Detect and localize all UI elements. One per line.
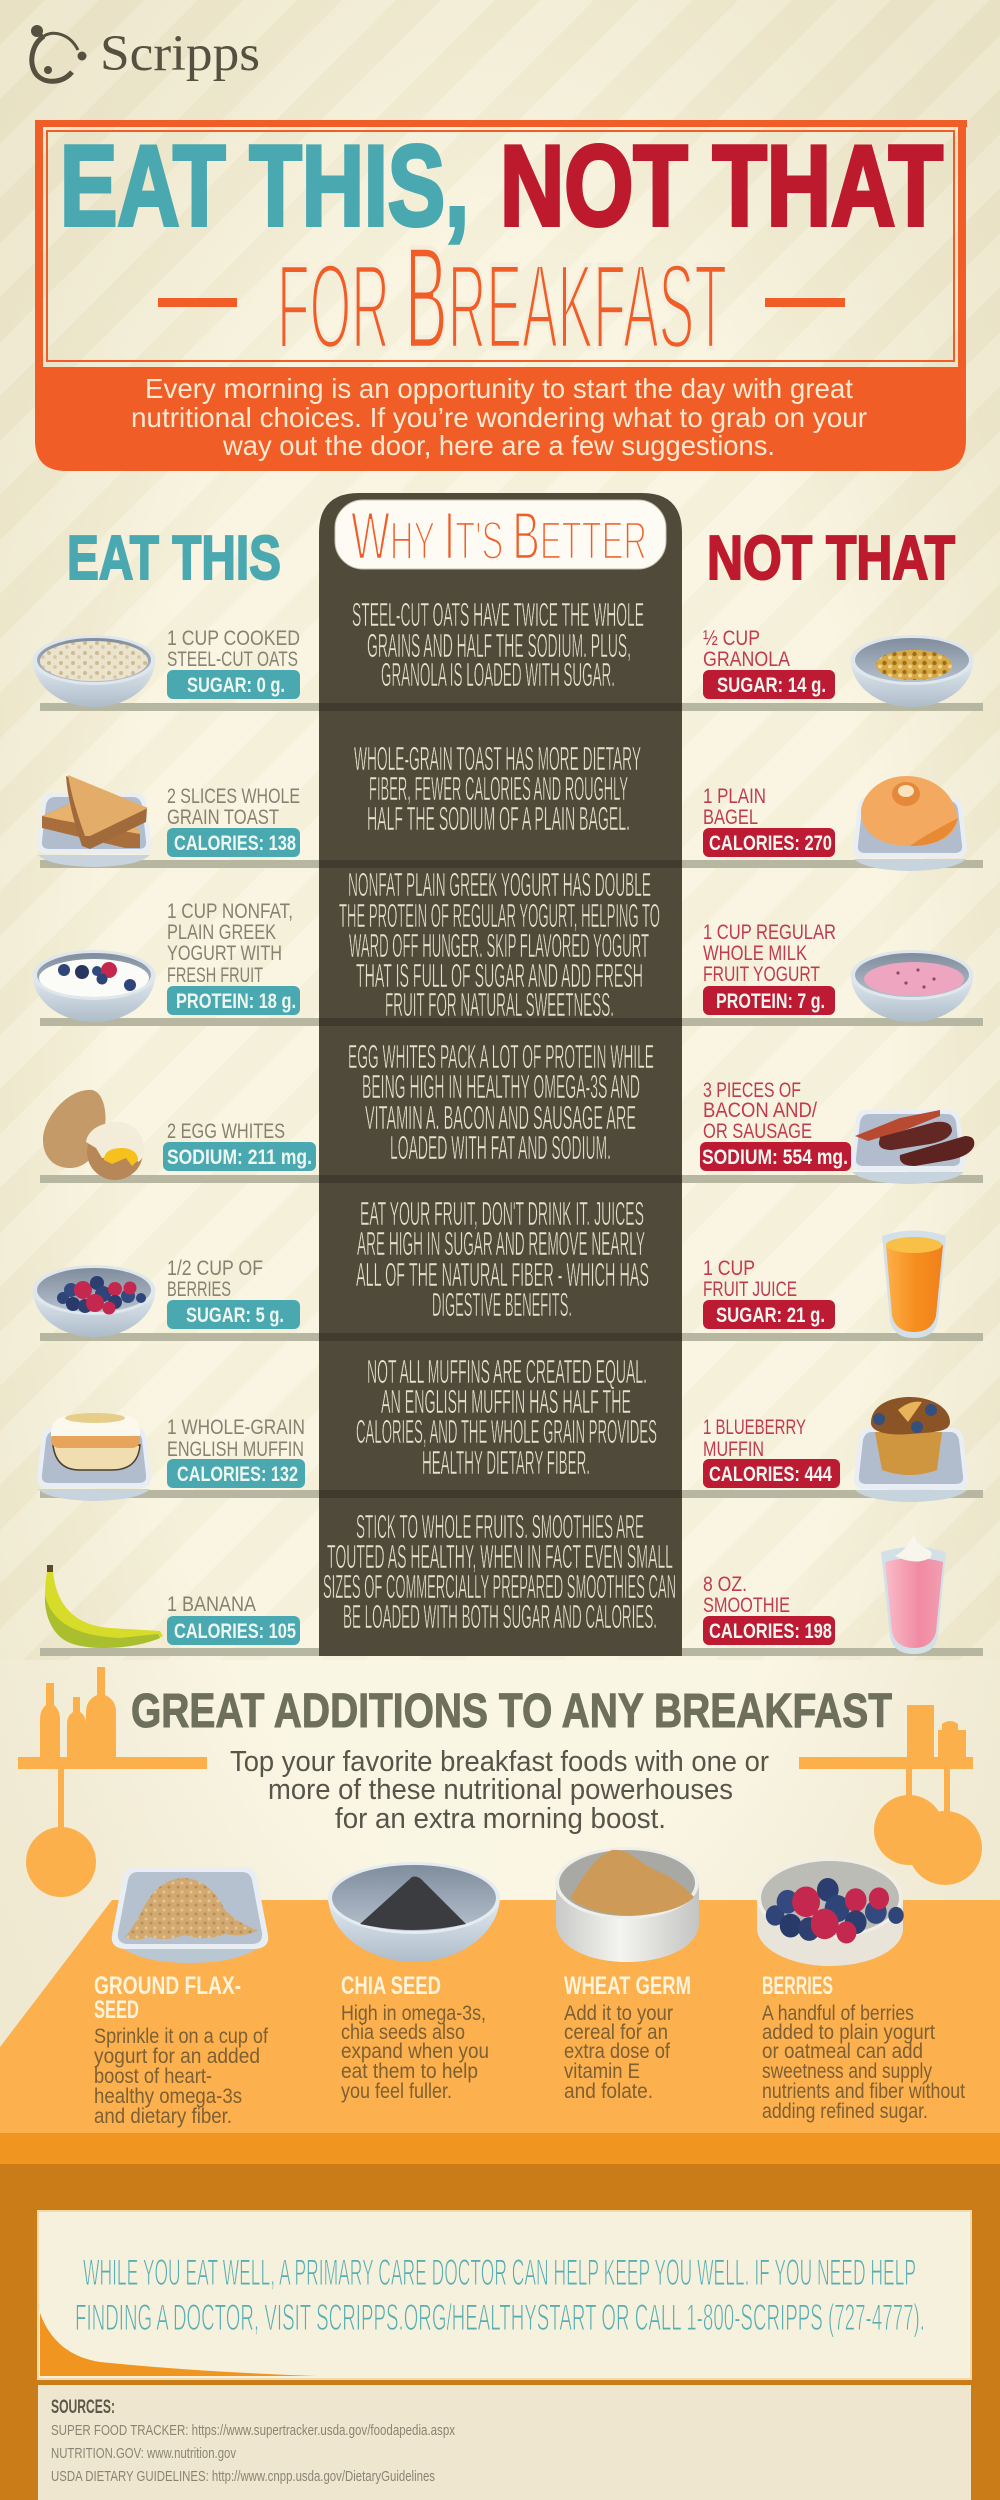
label — [167, 1257, 263, 1301]
row 5 right: juice — [703, 1230, 946, 1338]
icon: plate of bacon and sausage — [851, 1110, 974, 1184]
panel: why it's better: GRANOLA IS LOADED WITH SUGAR. — [381, 656, 615, 693]
stat pill — [700, 1142, 851, 1171]
heading: eat this: EAT THIS — [67, 524, 281, 593]
addition: chia seed: High in omega-3s, — [341, 2002, 486, 2025]
icon: toast on plate — [37, 775, 151, 867]
addition: wheat germ: WHEAT GERM — [564, 1972, 691, 2000]
title: eat this: EAT THIS, — [60, 123, 469, 250]
icon: flax seed tray — [112, 1867, 268, 1963]
row 6 left: english muffin — [37, 1413, 305, 1501]
addition: wheat germ: extra dose of — [564, 2040, 670, 2063]
icon: bowl of berries — [32, 1265, 156, 1337]
subtitle dash right — [765, 298, 845, 307]
label: BAGEL — [703, 806, 758, 829]
panel: why it's better: HALF THE SODIUM OF A PLAIN BAGEL. — [367, 800, 630, 837]
label — [703, 1573, 790, 1617]
icon: bowl of pink yogurt — [850, 950, 974, 1022]
addition: chia seed: CHIA SEED — [341, 1972, 441, 2000]
label: 8 OZ. — [703, 1573, 747, 1596]
stat pill: PROTEIN: 18 g. — [176, 990, 296, 1013]
label: 1 WHOLE-GRAIN — [167, 1416, 305, 1439]
text: additions intro — [230, 1746, 769, 1835]
label: ENGLISH MUFFIN — [167, 1438, 304, 1461]
panel: sources: NUTRITION.GOV: www.nutrition.gov — [51, 2445, 236, 2462]
text: additions intro: Top your favorite breakfast foods with one or — [230, 1746, 769, 1778]
row 6 right: blueberry muffin — [703, 1397, 968, 1502]
panel: why it's better: BEING HIGH IN HEALTHY OMEGA-3S AND — [362, 1068, 640, 1105]
label: 1 CUP — [703, 1257, 755, 1280]
label: WHOLE MILK — [703, 942, 807, 965]
label: 1 BLUEBERRY — [703, 1416, 806, 1439]
intro band — [35, 367, 966, 471]
label: MUFFIN — [703, 1438, 764, 1461]
stat pill: CALORIES: 444 — [709, 1463, 832, 1486]
panel: why it's better — [319, 493, 682, 1656]
row 2 left: toast — [37, 775, 300, 867]
text: eggs — [348, 1038, 654, 1166]
text: toast — [354, 740, 641, 837]
addition: flaxseed: boost of heart- — [94, 2065, 212, 2088]
addition: flaxseed: yogurt for an added — [94, 2045, 260, 2068]
row 4 right: bacon and sausage — [700, 1079, 974, 1184]
icon: bowl of yogurt with berries — [32, 950, 156, 1022]
stat pill — [163, 1142, 316, 1171]
stat pill: CALORIES: 270 — [709, 832, 832, 855]
stat pill — [703, 670, 835, 699]
icon: glass of juice — [882, 1230, 946, 1338]
panel: sources: SUPER FOOD TRACKER: https://www.supertracker.usda.gov/foodapedia.aspx — [51, 2422, 455, 2439]
label — [703, 785, 766, 829]
stat pill: SUGAR: 0 g. — [187, 674, 285, 697]
panel: why it's better: FRUIT FOR NATURAL SWEETNESS. — [385, 986, 614, 1023]
logo: Scripps — [31, 25, 260, 82]
text: additions intro: more of these nutritional powerhouses — [268, 1774, 733, 1806]
icon: bowl of oats — [32, 635, 156, 707]
label: SMOOTHIE — [703, 1594, 790, 1617]
addition: berries: nutrients and fiber without — [762, 2080, 965, 2103]
panel: call to action — [38, 2211, 971, 2379]
panel: sources — [38, 2385, 971, 2500]
stat pill: SODIUM: 211 mg. — [167, 1146, 312, 1169]
shelves — [40, 703, 983, 1656]
heading pill: WHY IT'S BETTER — [351, 498, 647, 574]
orange table — [0, 1900, 1000, 2500]
label: FRUIT JUICE — [703, 1278, 797, 1301]
text: yogurt — [339, 866, 660, 1023]
text: additions intro: for an extra morning boost. — [335, 1803, 666, 1835]
label: 2 SLICES WHOLE — [167, 785, 300, 808]
intro band: way out the door, here are a few suggestions. — [222, 430, 775, 461]
stat pill: SODIUM: 554 mg. — [702, 1146, 848, 1169]
panel: sources: SOURCES: — [51, 2397, 115, 2418]
icon: bagel on plate — [853, 776, 967, 871]
text: fruit — [356, 1195, 649, 1323]
label: FRUIT YOGURT — [703, 963, 820, 986]
addition: berries: BERRIES — [762, 1972, 833, 2000]
label: GRAIN TOAST — [167, 806, 279, 829]
icon: wheat germ bowl — [555, 1847, 699, 1962]
stat pill: SUGAR: 14 g. — [717, 674, 826, 697]
label: STEEL-CUT OATS — [167, 648, 298, 671]
logo: Scripps: Scripps — [100, 26, 260, 82]
addition: berries — [762, 1972, 965, 2123]
text: eggs: LOADED WITH FAT AND SODIUM. — [390, 1129, 611, 1166]
addition: berries: or oatmeal can add — [762, 2040, 923, 2063]
row 7 left: banana — [45, 1565, 300, 1648]
text: muffins — [356, 1353, 657, 1481]
addition: flaxseed — [94, 1972, 268, 2128]
stat pill — [167, 670, 300, 699]
addition: chia seed — [341, 1972, 489, 2103]
label: BERRIES — [167, 1278, 231, 1301]
intro band: nutritional choices. If you’re wondering what to grab on your — [131, 402, 867, 433]
label: YOGURT WITH — [167, 942, 282, 965]
addition: chia seed: expand when you — [341, 2040, 489, 2063]
label — [167, 1416, 305, 1461]
label — [167, 900, 293, 987]
kitchen shelf right with jar and pans — [799, 1705, 982, 1885]
text: oats — [352, 596, 644, 693]
addition: flaxseed: Sprinkle it on a cup of — [94, 2025, 268, 2048]
intro band: Every morning is an opportunity to start the day with great — [145, 373, 853, 404]
subtitle dash left — [158, 298, 237, 307]
addition: flaxseed: SEED — [94, 1996, 139, 2024]
addition: flaxseed: and dietary fiber. — [94, 2105, 232, 2128]
stat pill — [703, 986, 835, 1015]
row 1 right: granola — [703, 627, 974, 707]
label: 1 CUP NONFAT, — [167, 900, 293, 923]
stat pill — [167, 986, 300, 1015]
stat pill: CALORIES: 198 — [709, 1620, 832, 1643]
stat pill — [167, 828, 300, 857]
stat pill — [167, 1300, 300, 1329]
kitchen shelf left with bottles and spoon — [18, 1667, 207, 1897]
icon: chia seed bowl — [328, 1862, 500, 1962]
icon: bowl of granola — [850, 635, 974, 707]
stat pill — [703, 828, 835, 857]
label: 1 CUP COOKED — [167, 627, 300, 650]
title panel — [35, 120, 967, 379]
row 4 left: eggs — [43, 1090, 316, 1180]
icon: banana — [45, 1565, 163, 1648]
label: 1 BANANA — [167, 1593, 256, 1616]
addition: chia seed: eat them to help — [341, 2060, 478, 2083]
icon: berries bowl — [757, 1858, 904, 1966]
addition: chia seed: you feel fuller. — [341, 2080, 452, 2103]
addition: berries: A handful of berries — [762, 2002, 914, 2025]
row 5 left: berries — [32, 1257, 300, 1337]
stat pill: CALORIES: 132 — [177, 1463, 298, 1486]
label: BACON AND/ — [703, 1099, 817, 1122]
stat pill: SUGAR: 21 g. — [716, 1304, 825, 1327]
stat pill — [703, 1300, 835, 1329]
label: FRESH FRUIT — [167, 964, 263, 987]
stat pill: CALORIES: 138 — [174, 832, 296, 855]
row 1 left: oats — [32, 627, 300, 707]
addition: wheat germ: and folate. — [564, 2080, 653, 2103]
panel: why it's better: AN ENGLISH MUFFIN HAS HALF THE — [381, 1383, 631, 1420]
label: 3 PIECES OF — [703, 1079, 801, 1102]
panel: why it's better: VITAMIN A. BACON AND SAUSAGE ARE — [365, 1099, 636, 1136]
row 7 right: smoothie — [703, 1536, 946, 1654]
label: GRANOLA — [703, 648, 790, 671]
addition: berries: added to plain yogurt — [762, 2021, 935, 2044]
text: muffins: HEALTHY DIETARY FIBER. — [422, 1444, 590, 1481]
label: 1 CUP REGULAR — [703, 921, 836, 944]
addition: flaxseed: healthy omega-3s — [94, 2085, 242, 2108]
label — [703, 1257, 797, 1301]
panel: sources: USDA DIETARY GUIDELINES: http://www.cnpp.usda.gov/DietaryGuidelines — [51, 2468, 435, 2485]
label: 1/2 CUP OF — [167, 1257, 263, 1280]
addition: berries: sweetness and supply — [762, 2060, 932, 2083]
stat pill: CALORIES: 105 — [174, 1620, 296, 1643]
addition: wheat germ: Add it to your — [564, 2002, 673, 2025]
addition: berries: adding refined sugar. — [762, 2100, 928, 2123]
label — [703, 1416, 806, 1461]
text: smoothies — [323, 1508, 676, 1635]
label: ½ CUP — [703, 627, 760, 650]
label: 1 PLAIN — [703, 785, 766, 808]
label — [703, 1079, 817, 1143]
label: OR SAUSAGE — [703, 1120, 812, 1143]
label — [167, 627, 300, 671]
icon: english muffin on plate — [37, 1413, 151, 1501]
label: PLAIN GREEK — [167, 921, 276, 944]
row 3 right: fruit yogurt — [703, 921, 974, 1022]
icon: smoothie glass — [881, 1536, 946, 1654]
stat pill — [703, 1616, 835, 1645]
label — [703, 627, 790, 671]
addition: wheat germ: vitamin E — [564, 2060, 640, 2083]
icon: eggs — [43, 1090, 144, 1180]
text: fruit: DIGESTIVE BENEFITS. — [432, 1286, 572, 1323]
addition: flaxseed: GROUND FLAX- — [94, 1972, 241, 2000]
label: 2 EGG WHITES — [167, 1120, 285, 1143]
stat pill: SUGAR: 5 g. — [186, 1304, 284, 1327]
stat pill — [167, 1616, 300, 1645]
row 3 left: greek yogurt — [32, 900, 300, 1022]
addition: wheat germ — [564, 1972, 691, 2103]
addition: wheat germ: cereal for an — [564, 2021, 668, 2044]
stat pill: PROTEIN: 7 g. — [716, 990, 825, 1013]
stat pill — [167, 1459, 305, 1488]
row 2 right: bagel — [703, 776, 967, 871]
stat pill — [703, 1459, 840, 1488]
label — [167, 785, 300, 829]
label — [703, 921, 836, 986]
panel: why it's better: GRAINS AND HALF THE SODIUM. PLUS, — [367, 627, 631, 664]
icon: blueberry muffin on plate — [854, 1397, 968, 1502]
addition: chia seed: chia seeds also — [341, 2021, 465, 2044]
